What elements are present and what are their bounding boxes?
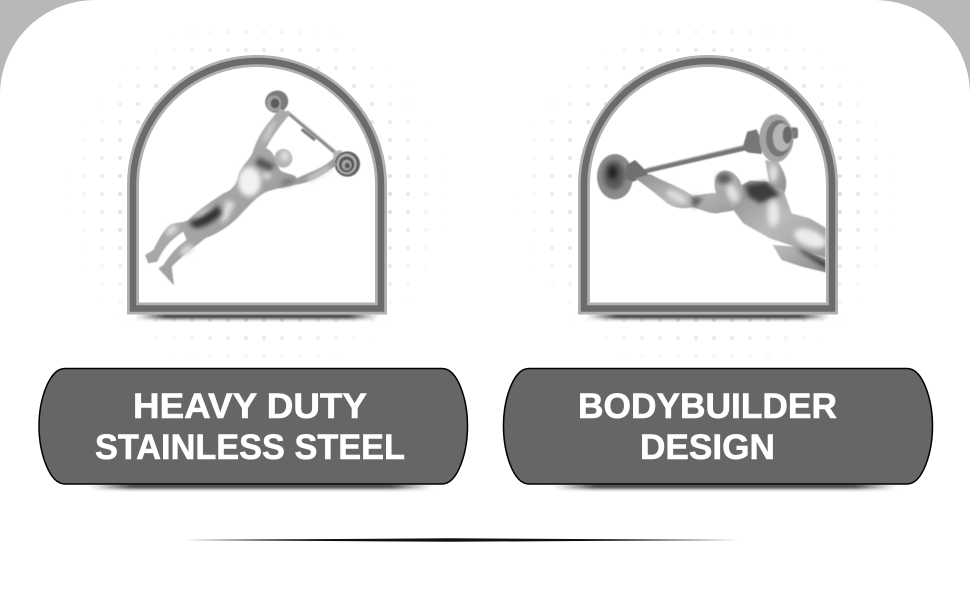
dot pattern right xyxy=(532,30,878,358)
muscle shading xyxy=(665,165,829,268)
barbell xyxy=(597,114,798,199)
muscle shading xyxy=(164,118,330,257)
body silhouette xyxy=(145,108,337,285)
head xyxy=(714,170,743,206)
banner shadow xyxy=(554,484,896,488)
dot pattern left xyxy=(82,30,428,358)
banner shape xyxy=(504,368,932,484)
label: bodybuilder design: BODYBUILDER xyxy=(578,387,837,426)
label: heavy duty stainless steel xyxy=(95,387,405,467)
banner shadow xyxy=(90,484,432,488)
grey page background xyxy=(0,0,970,100)
label: bodybuilder design xyxy=(578,387,837,467)
arch shadow xyxy=(136,314,378,318)
icon: bodybuilder with barbell, top view xyxy=(145,87,360,285)
panel: left label banner xyxy=(39,368,468,488)
panel: left arch with figure xyxy=(133,61,381,318)
barbell xyxy=(261,87,360,177)
thigh xyxy=(773,245,827,273)
raised arm xyxy=(765,160,786,198)
label: heavy duty stainless steel: STAINLESS STEEL xyxy=(95,428,405,467)
head xyxy=(274,149,292,168)
torso xyxy=(733,181,827,258)
arch shadow xyxy=(587,314,829,318)
arch frame xyxy=(133,61,381,308)
arch frame xyxy=(584,61,832,308)
lower arm and shoulder xyxy=(635,174,737,213)
banner shape xyxy=(39,368,468,484)
hand on left plate xyxy=(623,160,648,182)
icon: bodybuilder with barbell, close view xyxy=(597,114,829,273)
panel: right label banner xyxy=(504,368,932,488)
label: heavy duty stainless steel: HEAVY DUTY xyxy=(133,387,367,426)
shadow between legs xyxy=(188,205,222,228)
panel: right arch with figure xyxy=(584,61,832,318)
label: bodybuilder design: DESIGN xyxy=(640,428,775,467)
